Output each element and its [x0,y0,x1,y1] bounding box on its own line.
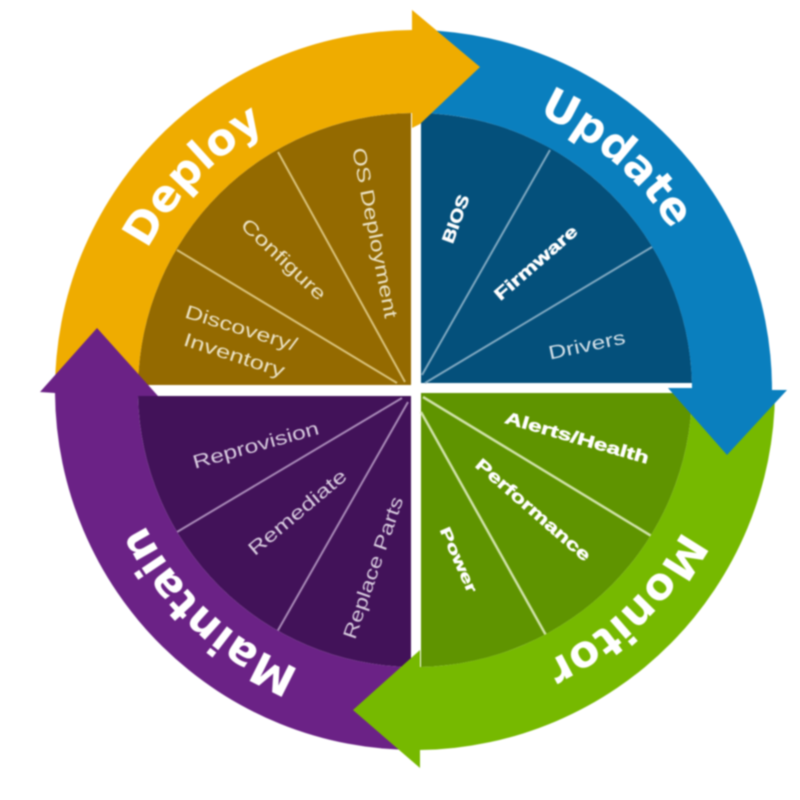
label: Power: Power [436,525,480,596]
panel: monitor sector [421,393,692,667]
label: Alerts/Health: Alerts/Health [503,408,651,468]
heading: Monitor: Monitor [553,533,710,685]
panel: maintain sector [138,396,411,667]
panel: deploy sector [138,113,411,385]
label: Discovery/Inventory: Inventory [181,330,288,382]
label: Discovery/Inventory: Discovery/ [182,302,300,356]
label: OS Deployment: OS Deployment [347,146,401,321]
label: Discovery/Inventory [181,302,300,382]
heading: Deploy: Deploy [120,106,259,246]
label: Drivers: Drivers [547,328,627,364]
arrow: monitor ring [353,392,775,768]
label: Replace Parts: Replace Parts [340,494,408,642]
label: Firmware: Firmware [491,222,581,304]
heading: Update: Update [544,86,687,228]
label: Performance: Performance [472,455,594,565]
arrow: update ring [420,30,787,455]
arrow: deploy arrowhead [412,10,480,128]
label: Remediate: Remediate [245,466,351,560]
heading: Maintain: Maintain [126,526,297,698]
label: Configure: Configure [236,215,330,305]
panel: update sector [421,113,692,383]
arrow: maintain ring [40,328,418,750]
label: BIOS: BIOS [439,192,473,246]
arrow: deploy ring [55,10,480,392]
label: Reprovision: Reprovision [191,418,321,474]
